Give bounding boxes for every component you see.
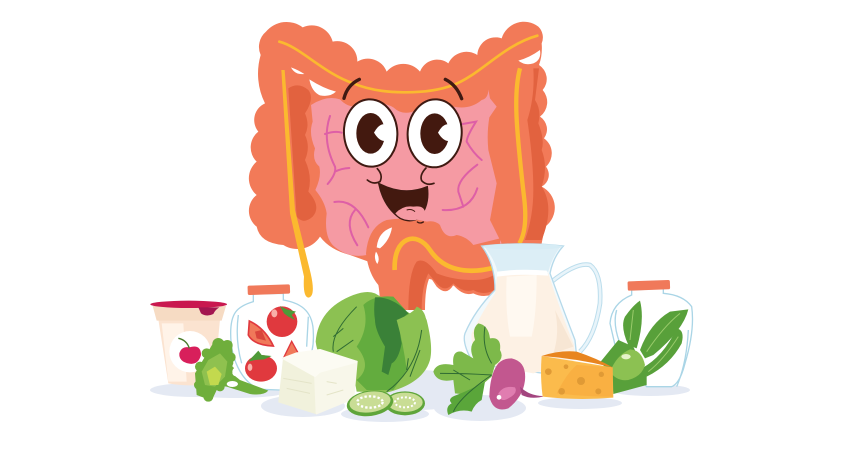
right eye	[405, 98, 464, 169]
broccoli	[194, 338, 268, 402]
ground shadows	[150, 370, 690, 422]
white highlights	[291, 50, 540, 264]
intestine character	[249, 22, 555, 310]
open mouth	[379, 183, 428, 223]
cheese wedge	[541, 351, 613, 399]
tomato jar	[231, 284, 313, 390]
radish leaves	[433, 323, 502, 415]
lettuce	[316, 292, 431, 393]
yogurt cup	[150, 301, 227, 385]
second vegetable jar	[601, 280, 692, 394]
left foods	[150, 284, 431, 419]
left yellow line with drop	[281, 70, 313, 298]
left eye	[342, 98, 400, 168]
cucumber slices	[345, 388, 425, 419]
tofu block	[279, 350, 357, 413]
lower loop of intestine	[366, 219, 500, 310]
dark rectum fold	[408, 261, 497, 310]
cheek lines	[367, 168, 434, 184]
beet radish	[489, 358, 545, 409]
left dark fold	[288, 85, 316, 221]
eyebrows	[344, 79, 462, 99]
pink blood vessels	[325, 116, 482, 245]
large intestine body	[249, 22, 555, 297]
right yellow line	[516, 68, 525, 243]
pink inner abdomen	[311, 89, 502, 257]
lower yellow line	[395, 239, 495, 271]
milk pitcher	[464, 244, 600, 373]
top yellow line	[279, 36, 537, 92]
right dark fold	[525, 68, 548, 240]
right foods	[433, 244, 692, 415]
